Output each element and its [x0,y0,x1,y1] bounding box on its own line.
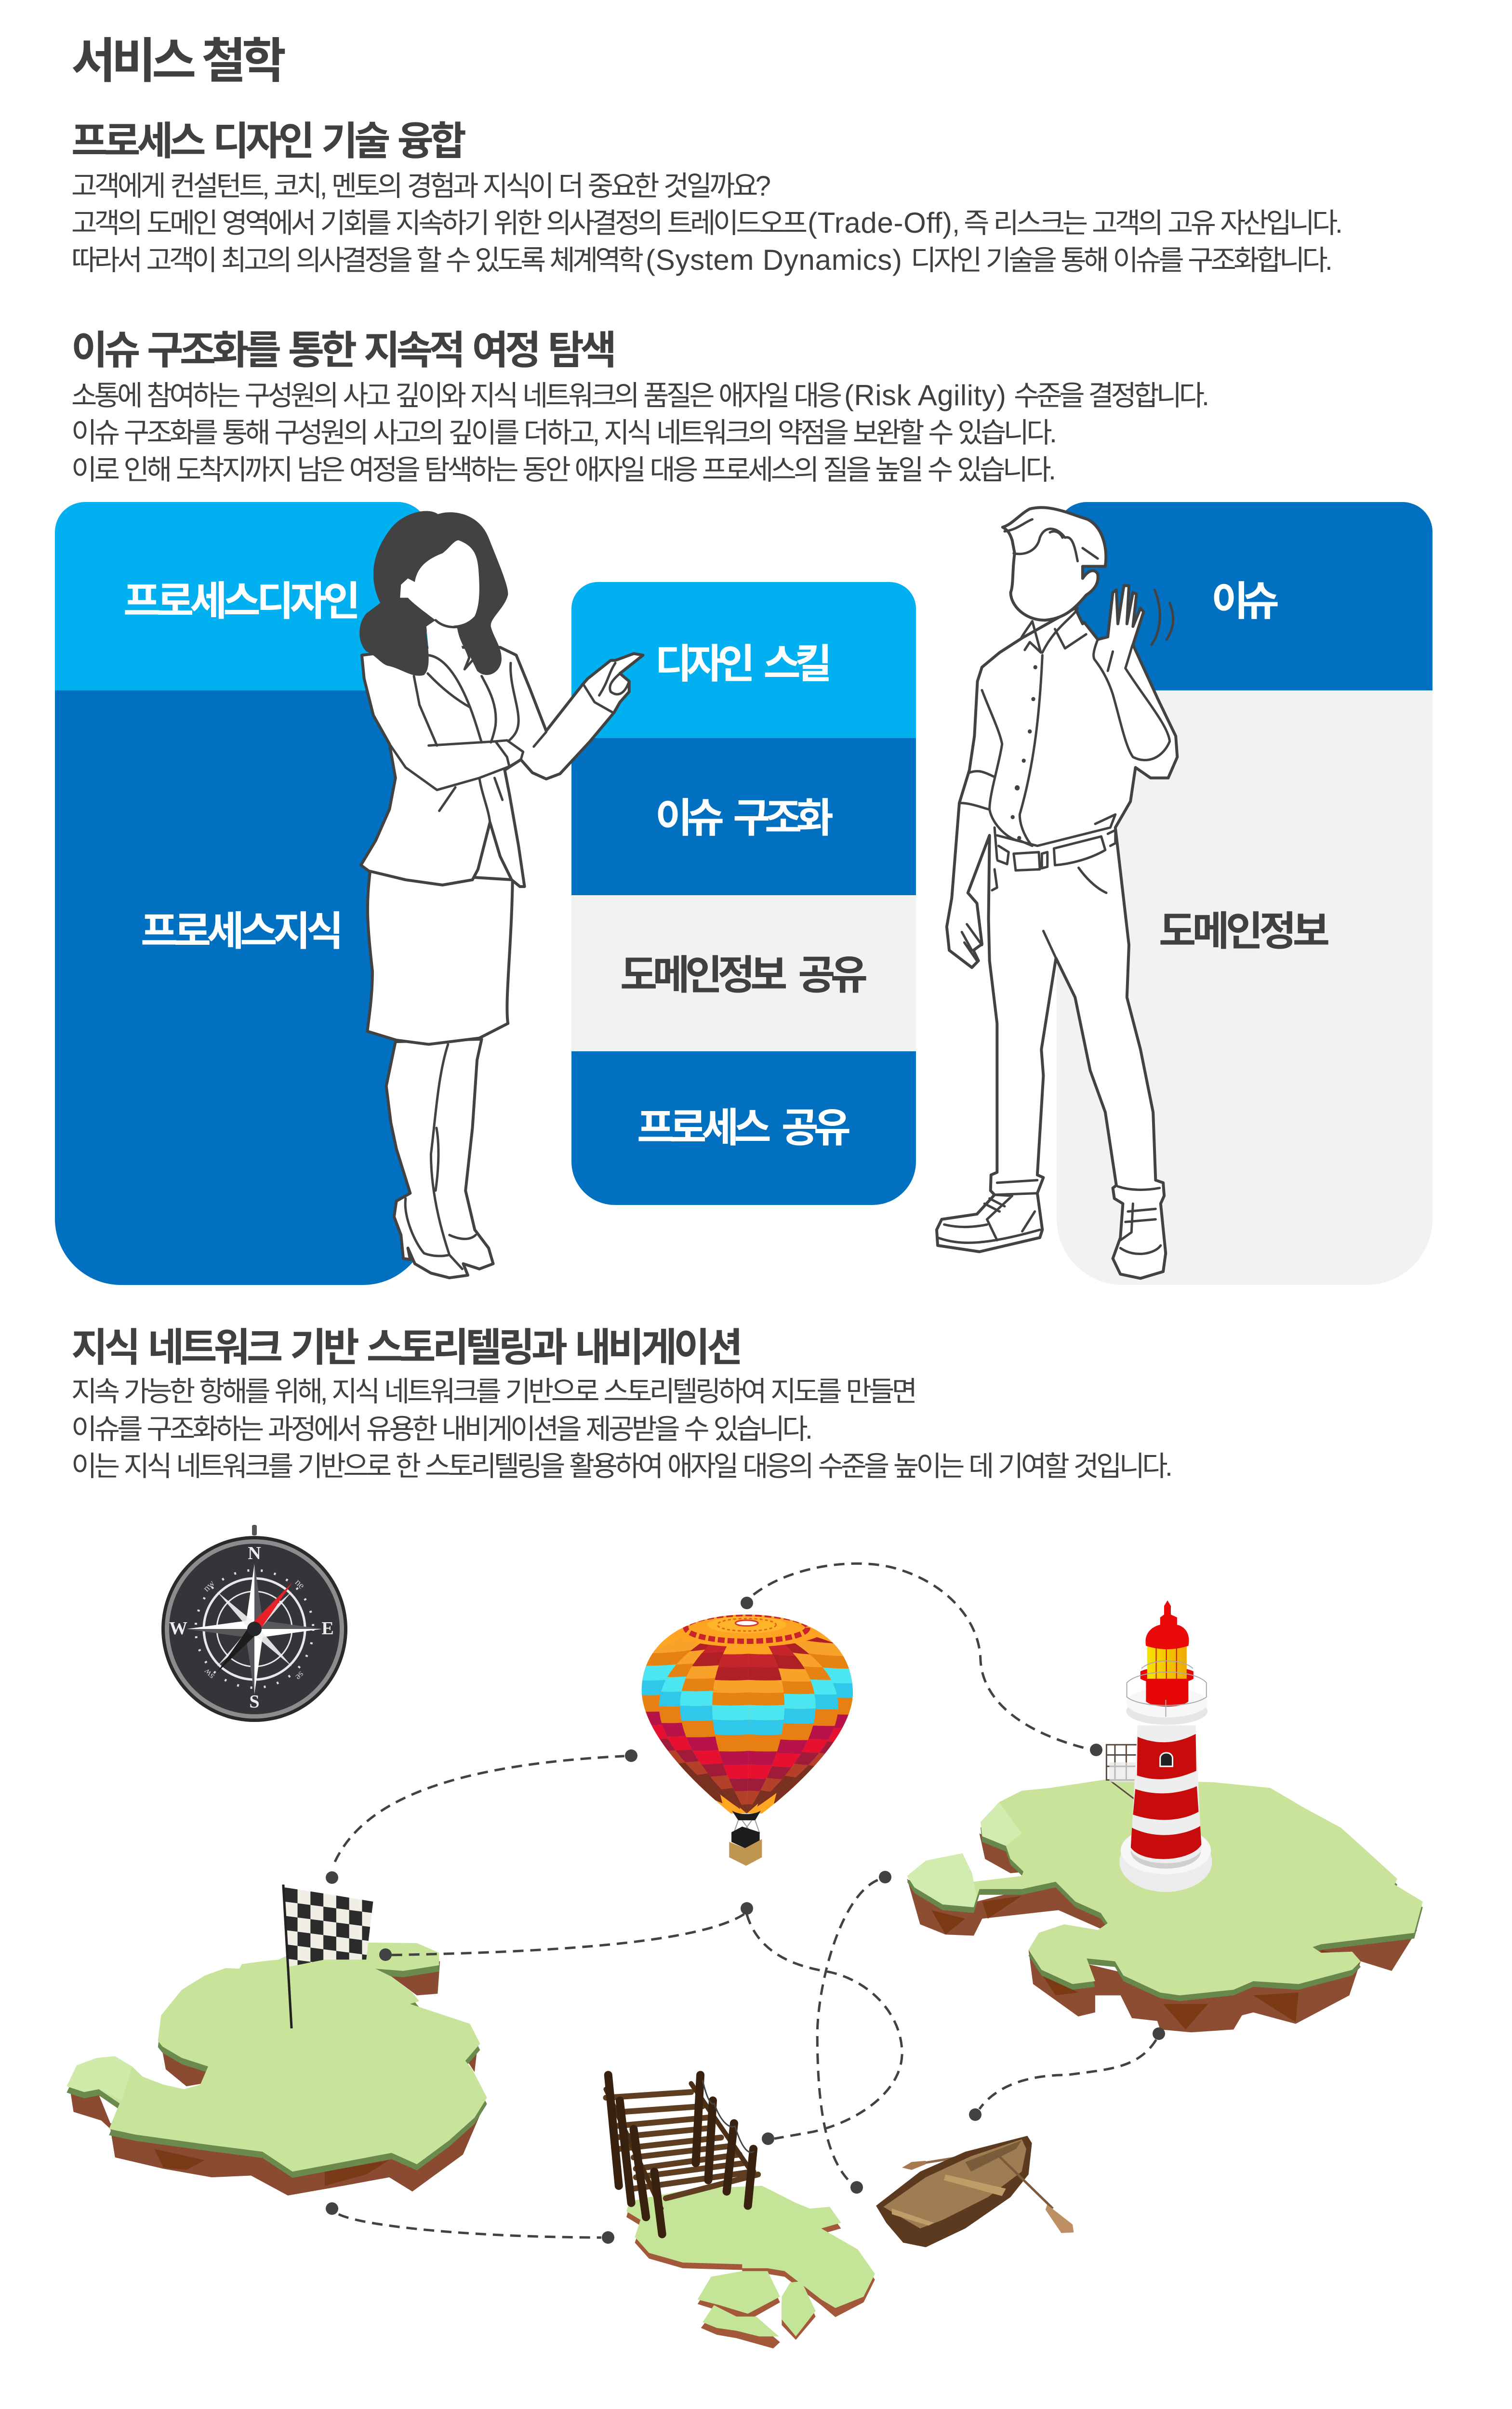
block: design skill [571,582,916,738]
icon: compass [161,1525,347,1722]
label: issue: 이슈 [1211,579,1279,624]
block: issue structuring [571,738,916,895]
label: design skill: 디자인 스킬 [655,641,832,687]
icon: rowing boat [876,2136,1074,2247]
text block: process design: (Trade-Off) [808,207,952,239]
text block: issue structuring: 소통에 참여하는 구성원의 사고 깊이와 지식 네트워크의 품질은 애자일 대응 [71,380,842,411]
text block: process design: (System Dynamics) [646,244,902,276]
text block: issue structuring: 이슈 구조화를 통해 구성원의 사고의 깊이를 더하고, 지식 네트워크의 약점을 보완할 수 있습니다. [71,417,1057,449]
panel: centre stack [571,582,916,1205]
panel block: process design [55,502,429,690]
icon: compass: W [169,1618,187,1639]
text block: process design: , 즉 리스크는 고객의 고유 자산입니다. [952,208,1343,239]
island: flag [66,1884,487,2196]
text block: process design: 따라서 고객이 최고의 의사결정을 할 수 있도록 체계역학 [71,245,644,276]
text block: issue structuring: 수준을 결정합니다. [1014,380,1209,411]
text block: process design: 고객에게 컨설턴트, 코치, 멘토의 경험과 지식이 더 중요한 것일까요? [71,171,771,202]
label: domain info: 도메인정보 [1159,909,1330,954]
icon: compass: N [248,1543,261,1563]
figure: man calling out [937,507,1177,1278]
panel block: domain info [1057,690,1432,1285]
icon: compass: sw [201,1666,216,1681]
label: issue structuring: 이슈 구조화 [655,795,834,841]
icon: compass: ne [293,1577,307,1591]
text block: knowledge network: 이슈를 구조화하는 과정에서 유용한 내비게이션을 제공받을 수 있습니다. [71,1414,813,1445]
text block: issue structuring: 이로 인해 도착지까지 남은 여정을 탐색하는 동안 애자일 대응 프로세스의 질을 높일 수 있습니다. [71,454,1056,486]
panel block: process knowledge [55,690,429,1285]
panel: right issue [1057,502,1432,1285]
heading: process design: 프로세스 디자인 기술 융합 [71,119,466,163]
icon: lighthouse [1106,1601,1212,1892]
icon: wooden pier [606,2075,758,2234]
label: process knowledge: 프로세스지식 [141,909,344,954]
section: knowledge network [71,1326,1173,1482]
route: flag to balloon [335,1756,744,2237]
panel block: issue [1057,502,1432,690]
label: process share: 프로세스 공유 [637,1105,851,1151]
icon: compass: S [249,1692,260,1712]
icon: checkered flag [283,1884,373,2028]
text block: knowledge network: 이는 지식 네트워크를 기반으로 한 스토리텔링을 활용하여 애자일 대응의 수준을 높이는 데 기여할 것입니다. [71,1451,1173,1482]
heading: issue structuring: 이슈 구조화를 통한 지속적 여정 탐색 [71,329,617,372]
icon: compass: E [321,1618,334,1639]
route: balloon, lighthouse, pier, boat [747,1563,1156,2183]
figure: woman pointing [359,511,643,1278]
icon: hot-air balloon [642,1615,853,1866]
block: process share [571,1051,916,1205]
dashed route paths [335,1563,1156,2237]
text block: issue structuring: (Risk Agility) [844,379,1006,411]
section: issue structuring [71,329,1209,486]
block: domain info share [571,895,916,1051]
title: 서비스 철학 [71,34,286,88]
text block: process design: 고객의 도메인 영역에서 기회를 지속하기 위한 의사결정의 트레이드오프 [71,208,808,239]
text block: process design [71,171,1343,276]
panel: left process [55,502,429,1285]
text block: knowledge network [71,1376,1173,1482]
text block: issue structuring [71,379,1209,486]
icon: compass: se [293,1669,306,1682]
label: domain info share: 도메인정보 공유 [620,953,868,998]
route waypoints [326,1597,1165,2244]
label: process design: 프로세스디자인 [123,579,360,624]
island: pier [626,2186,875,2348]
text block: knowledge network: 지속 가능한 항해를 위해, 지식 네트워크를 기반으로 스토리텔링하여 지도를 만들면 [71,1376,917,1407]
island: lighthouse [907,1601,1423,2032]
heading: knowledge network: 지식 네트워크 기반 스토리텔링과 내비게이션 [71,1326,743,1370]
stair cage [1106,1745,1138,1800]
text block: process design: 디자인 기술을 통해 이슈를 구조화합니다. [911,245,1333,276]
section: process design [71,119,1343,276]
icon: compass: nw [201,1578,217,1594]
